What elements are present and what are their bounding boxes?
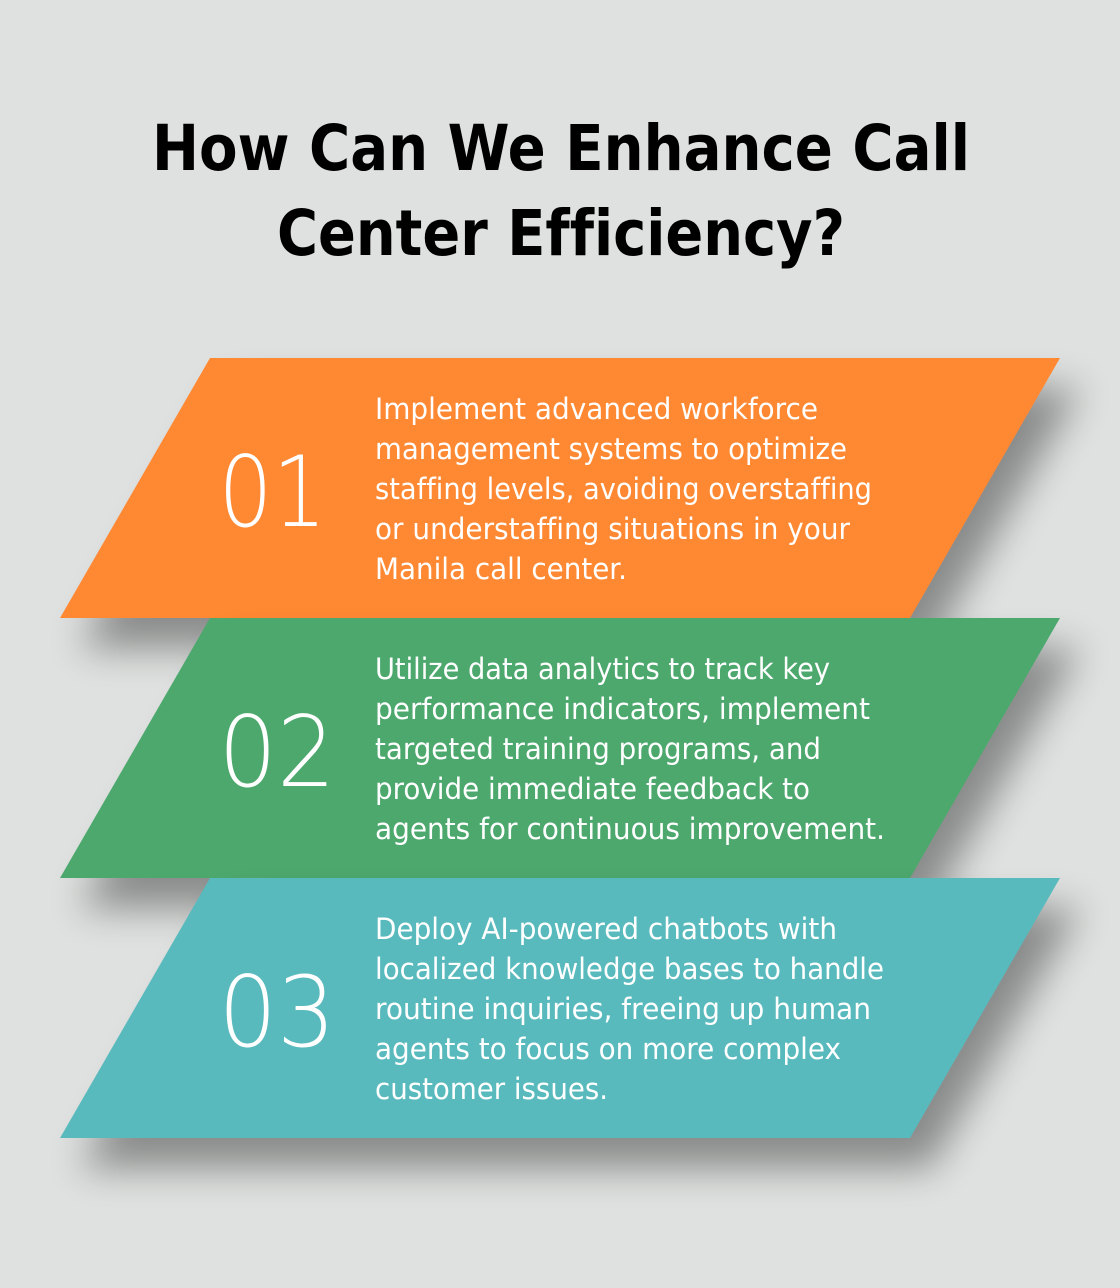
text: step 02 — [375, 652, 885, 846]
text: step 01: staffing levels, avoiding overstaffing — [375, 472, 872, 506]
text: step 01 — [375, 392, 872, 586]
text: step 03: customer issues. — [375, 1072, 608, 1106]
text: step 03 — [375, 912, 884, 1106]
text: step 03: localized knowledge bases to handle — [375, 952, 884, 986]
panel: step 01 — [60, 358, 1080, 648]
text: step 02: provide immediate feedback to — [375, 772, 810, 806]
number 02: 02 — [218, 696, 336, 810]
title: How Can We Enhance Call — [152, 112, 970, 185]
text: step 03: agents to focus on more complex — [375, 1032, 841, 1066]
text: step 01: Manila call center. — [375, 552, 627, 586]
title — [152, 112, 970, 270]
text: step 01: management systems to optimize — [375, 432, 847, 466]
text: step 02: targeted training programs, and — [375, 732, 821, 766]
panel: step 03 — [60, 878, 1080, 1168]
text: step 01: or understaffing situations in your — [375, 512, 850, 546]
text: step 02: agents for continuous improvement. — [375, 812, 885, 846]
number 03: 03 — [218, 956, 336, 1070]
text: step 01: Implement advanced workforce — [375, 392, 818, 426]
text: step 03: Deploy AI-powered chatbots with — [375, 912, 837, 946]
panel: step 02 — [60, 618, 1080, 908]
text: step 02: Utilize data analytics to track key — [375, 652, 830, 686]
number 01: 01 — [218, 436, 326, 550]
text: step 03: routine inquiries, freeing up human — [375, 992, 871, 1026]
title: Center Efficiency? — [277, 197, 845, 270]
text: step 02: performance indicators, implement — [375, 692, 870, 726]
